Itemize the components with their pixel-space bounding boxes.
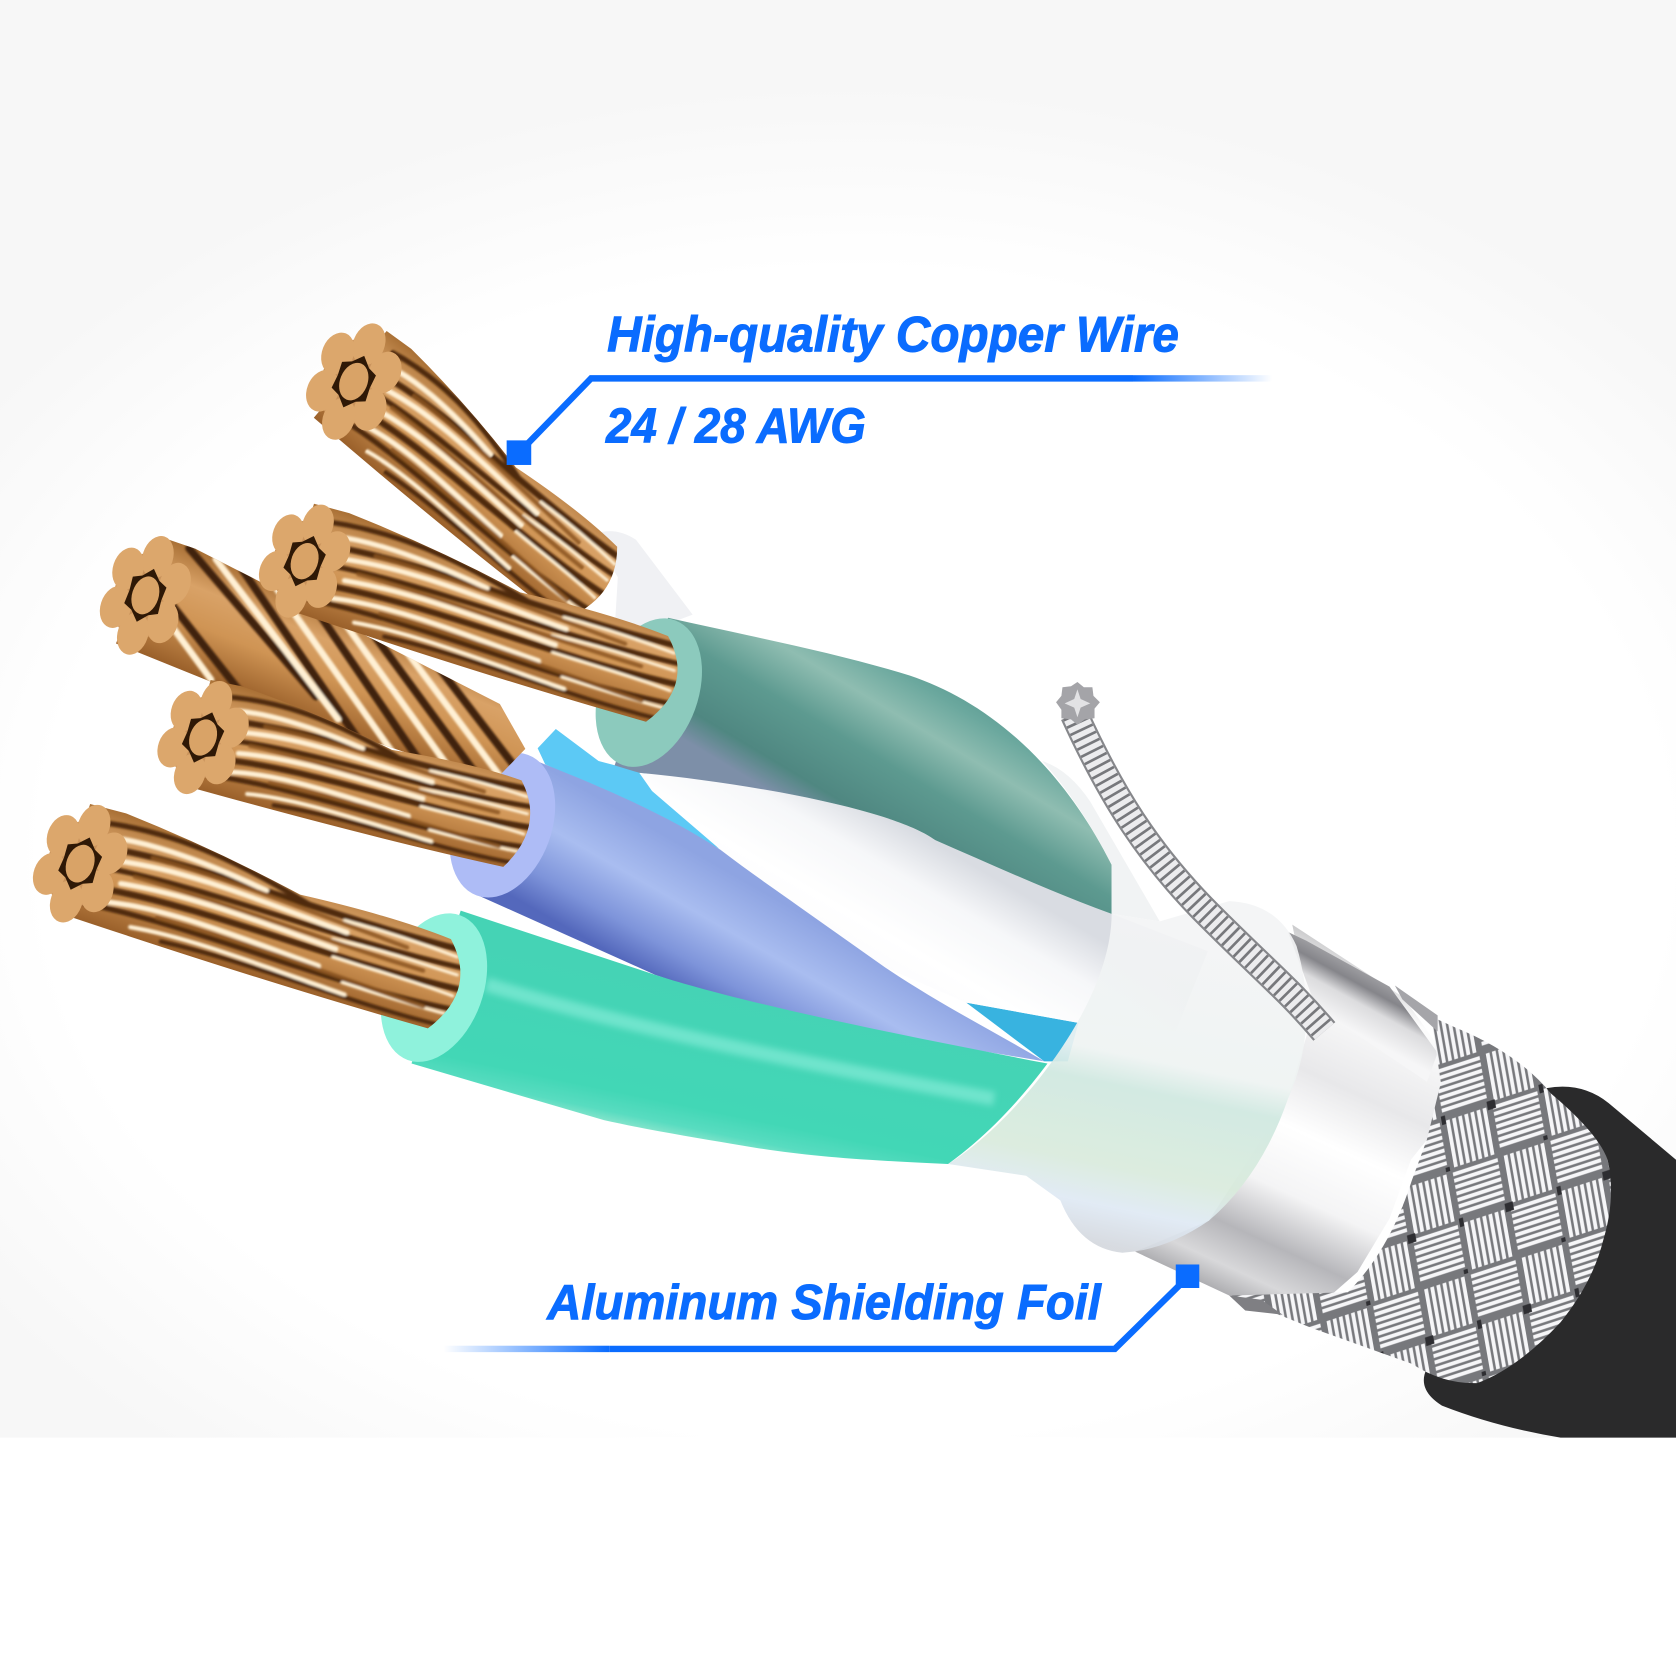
wire: white insulated core [639,773,1208,1031]
copper strand: lower middle [145,668,547,876]
aluminum foil: film edge above teal core [1042,761,1160,921]
copper strand: bottom [20,791,481,1039]
label: wire gauge: 24 / 28 AWG [605,399,866,454]
heading: shielding foil label: Aluminum Shielding Foil [545,1275,1102,1330]
copper strand: top [293,309,646,634]
copper strand: back diagonal [88,524,554,803]
wire: mint green insulated core [361,899,1047,1164]
aluminum foil: exposed metallic inner band [1288,932,1438,1082]
wire: blue-violet insulated core [431,738,1044,1061]
wire: dark teal insulated core [576,603,1112,914]
wire: white insulated tube behind top strand [593,531,693,636]
copper strand: upper middle [247,492,698,732]
drain wire [1056,682,1324,1031]
cable jacket: black outer sheath [1424,1087,1676,1438]
aluminum foil: translucent film section [948,901,1306,1253]
aluminum foil: silver tube [1135,925,1445,1309]
wire: cyan insulated core [538,729,1078,1061]
metal braid shield [1229,986,1611,1383]
callout line: copper wire [507,375,1272,465]
heading: copper wire label: High-quality Copper Wire [607,307,1179,363]
callout line: shielding foil [444,1264,1199,1352]
